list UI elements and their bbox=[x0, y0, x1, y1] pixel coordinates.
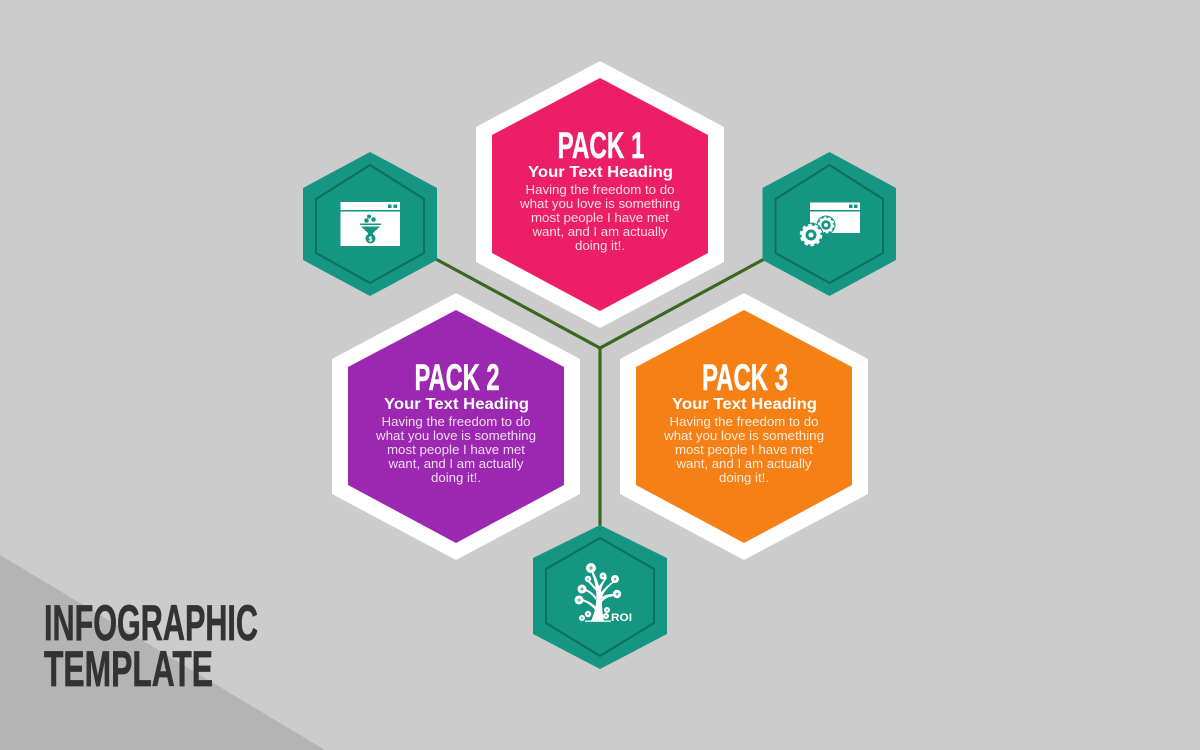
panel: pack 2 bbox=[332, 293, 580, 560]
badge: ROI tree bbox=[533, 525, 667, 669]
panel: pack 3: Having the freedom to do bbox=[670, 414, 818, 429]
panel: pack 1: Your Text Heading bbox=[528, 164, 673, 181]
panel: pack 3: most people I have met bbox=[675, 442, 813, 457]
connector lines bbox=[432, 257, 768, 530]
panel: pack 1: Having the freedom to do bbox=[526, 182, 674, 197]
icon: browser window with funnel bbox=[340, 202, 400, 246]
icon: money tree bbox=[574, 563, 632, 624]
badge: gears bbox=[762, 152, 896, 296]
panel: pack 2: Having the freedom to do bbox=[382, 414, 530, 429]
panel: pack 3: Your Text Heading bbox=[672, 396, 817, 413]
panel: pack 3: what you love is something bbox=[663, 428, 824, 443]
panel: pack 1: most people I have met bbox=[531, 210, 669, 225]
panel: pack 2: Your Text Heading bbox=[384, 396, 529, 413]
panel: pack 2: want, and I am actually bbox=[387, 456, 524, 471]
panel: pack 1: doing it!. bbox=[575, 238, 625, 253]
panel: pack 3 bbox=[620, 293, 868, 560]
panel: pack 3: want, and I am actually bbox=[675, 456, 812, 471]
panel: pack 2: most people I have met bbox=[387, 442, 525, 457]
corner title: TEMPLATE bbox=[44, 641, 213, 697]
background corner triangle bbox=[0, 555, 325, 750]
icon: browser window with gears bbox=[798, 202, 860, 248]
panel: pack 3: PACK 3 bbox=[702, 357, 788, 398]
icon: money tree: ROI bbox=[611, 612, 632, 624]
panel: pack 2: doing it!. bbox=[431, 470, 481, 485]
corner title bbox=[44, 595, 258, 697]
panel: pack 2: what you love is something bbox=[375, 428, 536, 443]
corner title: INFOGRAPHIC bbox=[44, 595, 258, 651]
panel: pack 1: want, and I am actually bbox=[531, 224, 668, 239]
panel: pack 1 bbox=[476, 61, 724, 328]
panel: pack 3: doing it!. bbox=[719, 470, 769, 485]
badge: funnel bbox=[303, 152, 437, 296]
panel: pack 1: PACK 1 bbox=[558, 125, 644, 166]
panel: pack 2: PACK 2 bbox=[414, 357, 500, 398]
panel: pack 1: what you love is something bbox=[519, 196, 680, 211]
icon: browser window with funnel: $ bbox=[369, 236, 373, 244]
